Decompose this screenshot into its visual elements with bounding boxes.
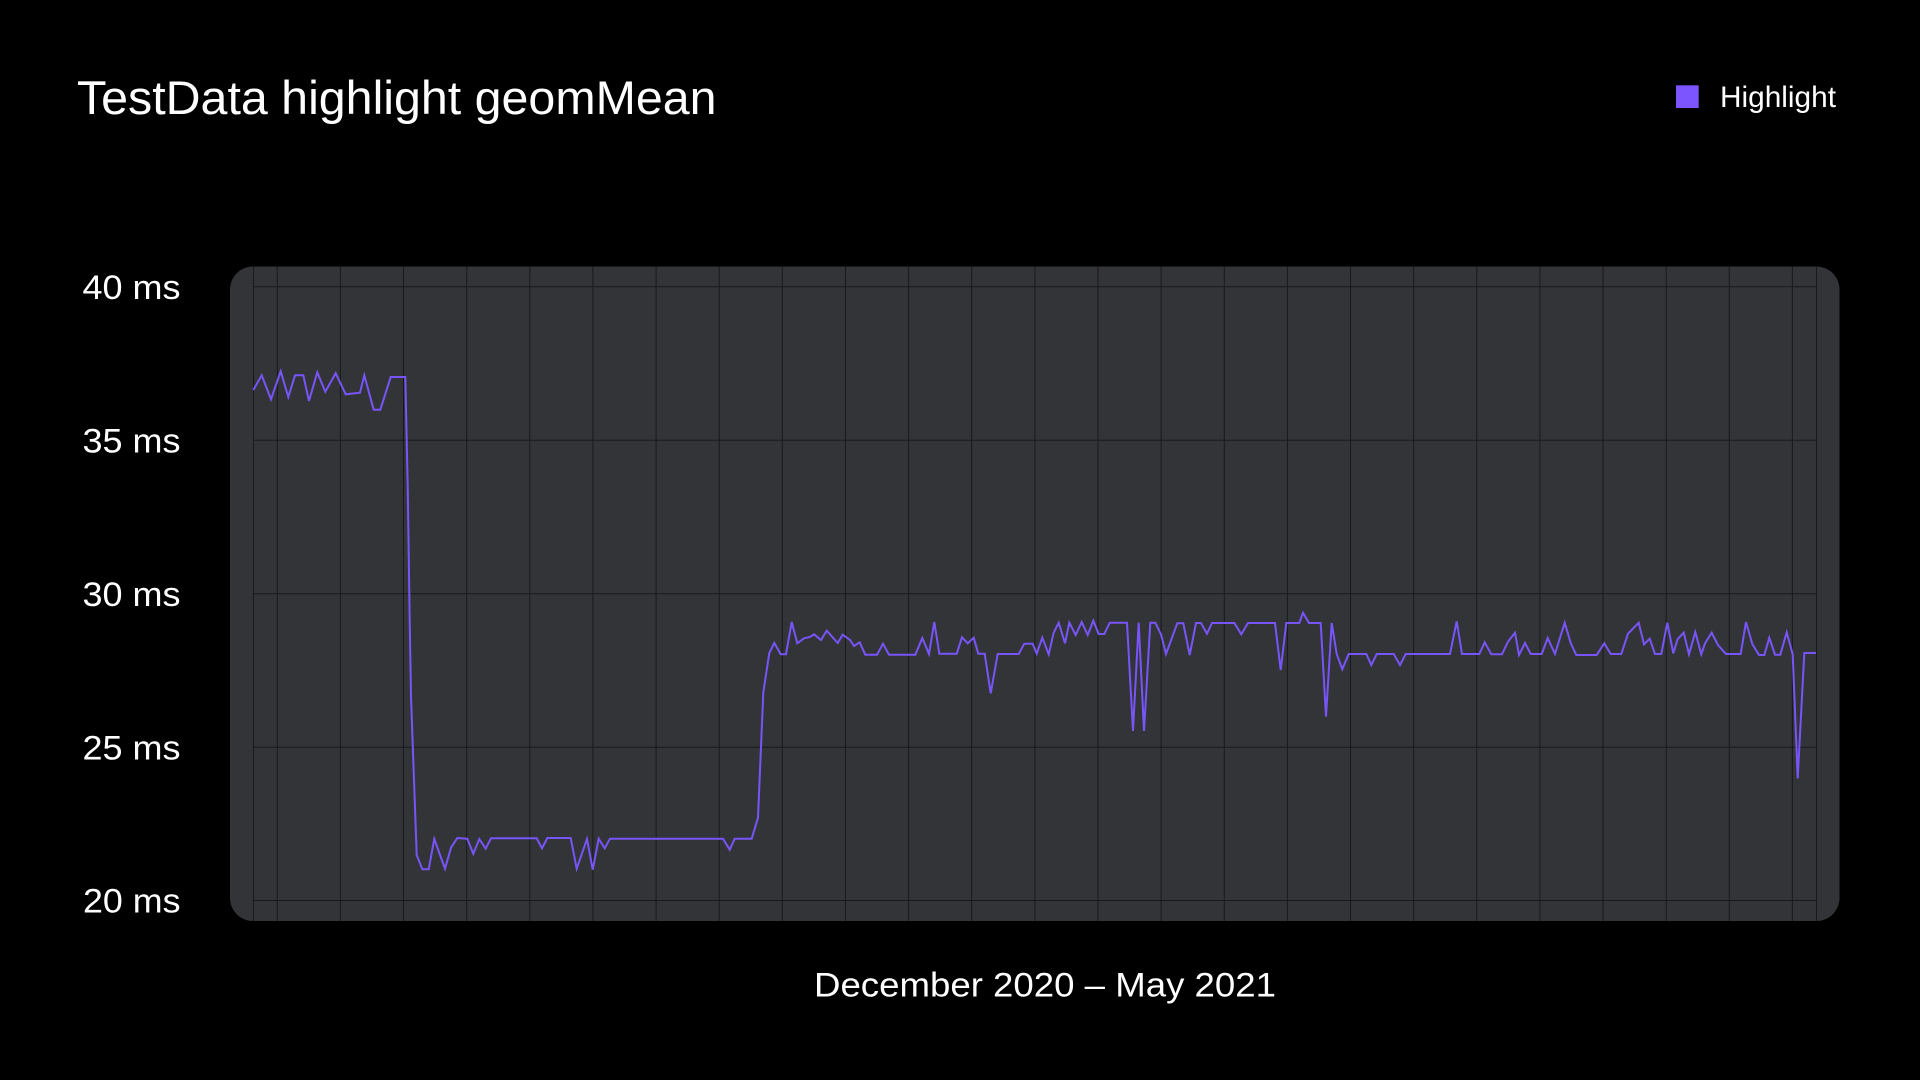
label: 20 ms: 20 ms [83,883,180,921]
chart gridlines [254,266,1816,921]
legend label: Highlight [1720,81,1837,114]
label: 40 ms: 40 ms [82,269,180,307]
label: 25 ms: 25 ms [82,729,180,767]
label: 35 ms: 35 ms [82,422,180,460]
legend [1676,81,1837,114]
legend swatch: Highlight [1676,85,1699,108]
y-axis labels [82,269,180,921]
x-axis label: December 2020 – May 2021 [814,967,1276,1005]
label: 30 ms: 30 ms [82,576,180,614]
chart panel [230,266,1840,921]
title: TestData highlight geomMean [77,71,717,124]
line series: Highlight [253,371,1816,870]
